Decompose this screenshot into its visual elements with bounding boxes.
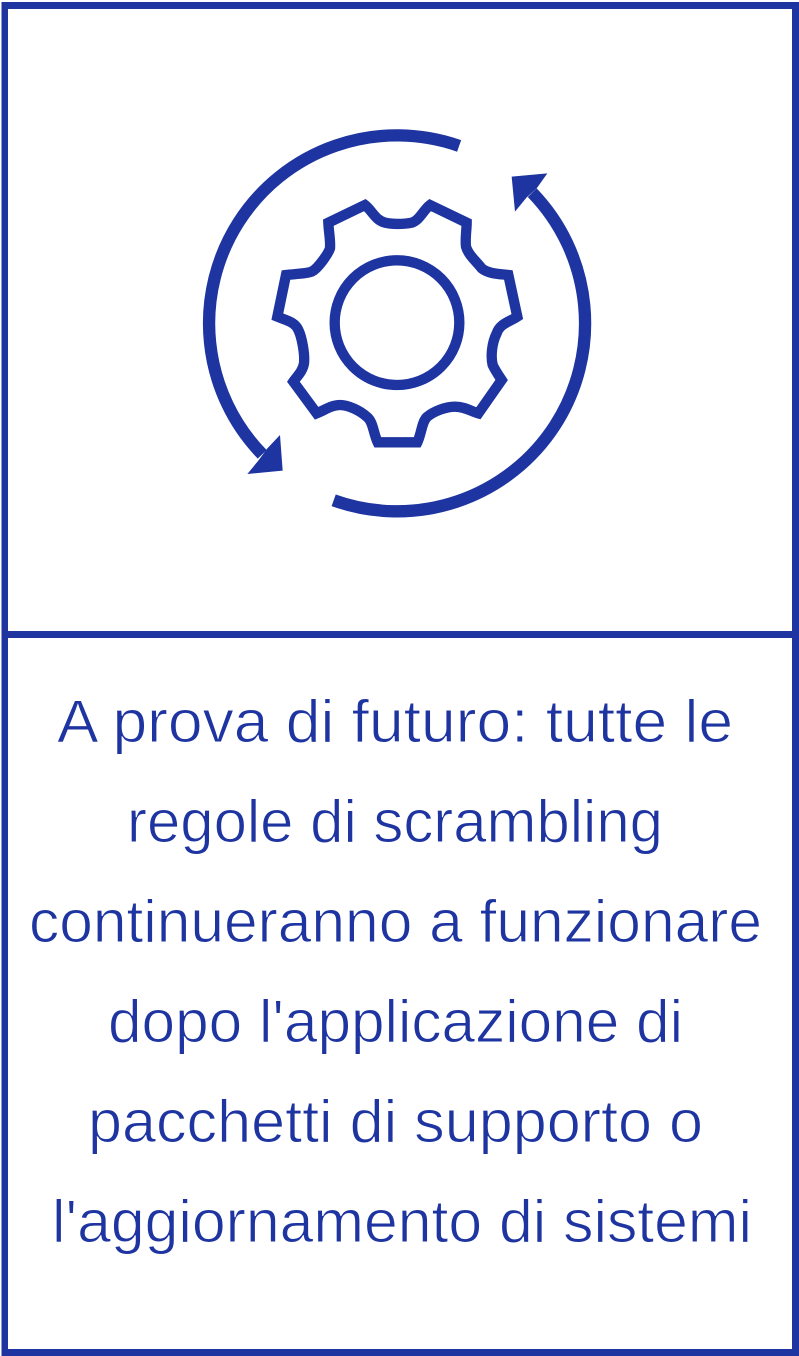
- icon part: right arc: [334, 193, 585, 511]
- icon part: left arrowhead: [247, 435, 283, 474]
- text line 5: pacchetti di supporto o: [88, 1088, 703, 1155]
- text line 2: regole di scrambling: [127, 788, 663, 855]
- icon part: left arc: [209, 135, 459, 454]
- icon: gear with circular arrows: [209, 135, 585, 511]
- text block: description: [29, 688, 762, 1255]
- text line 3: continueranno a funzionare: [29, 888, 762, 955]
- text line 6: l'aggiornamento di sistemi: [52, 1188, 752, 1255]
- text line 4: dopo l'applicazione di: [108, 988, 683, 1055]
- icon part: gear hub: [335, 260, 459, 385]
- text line 1: A prova di futuro: tutte le: [57, 688, 733, 755]
- icon part: gear outline: [277, 205, 517, 442]
- icon part: right arrowhead: [512, 173, 547, 212]
